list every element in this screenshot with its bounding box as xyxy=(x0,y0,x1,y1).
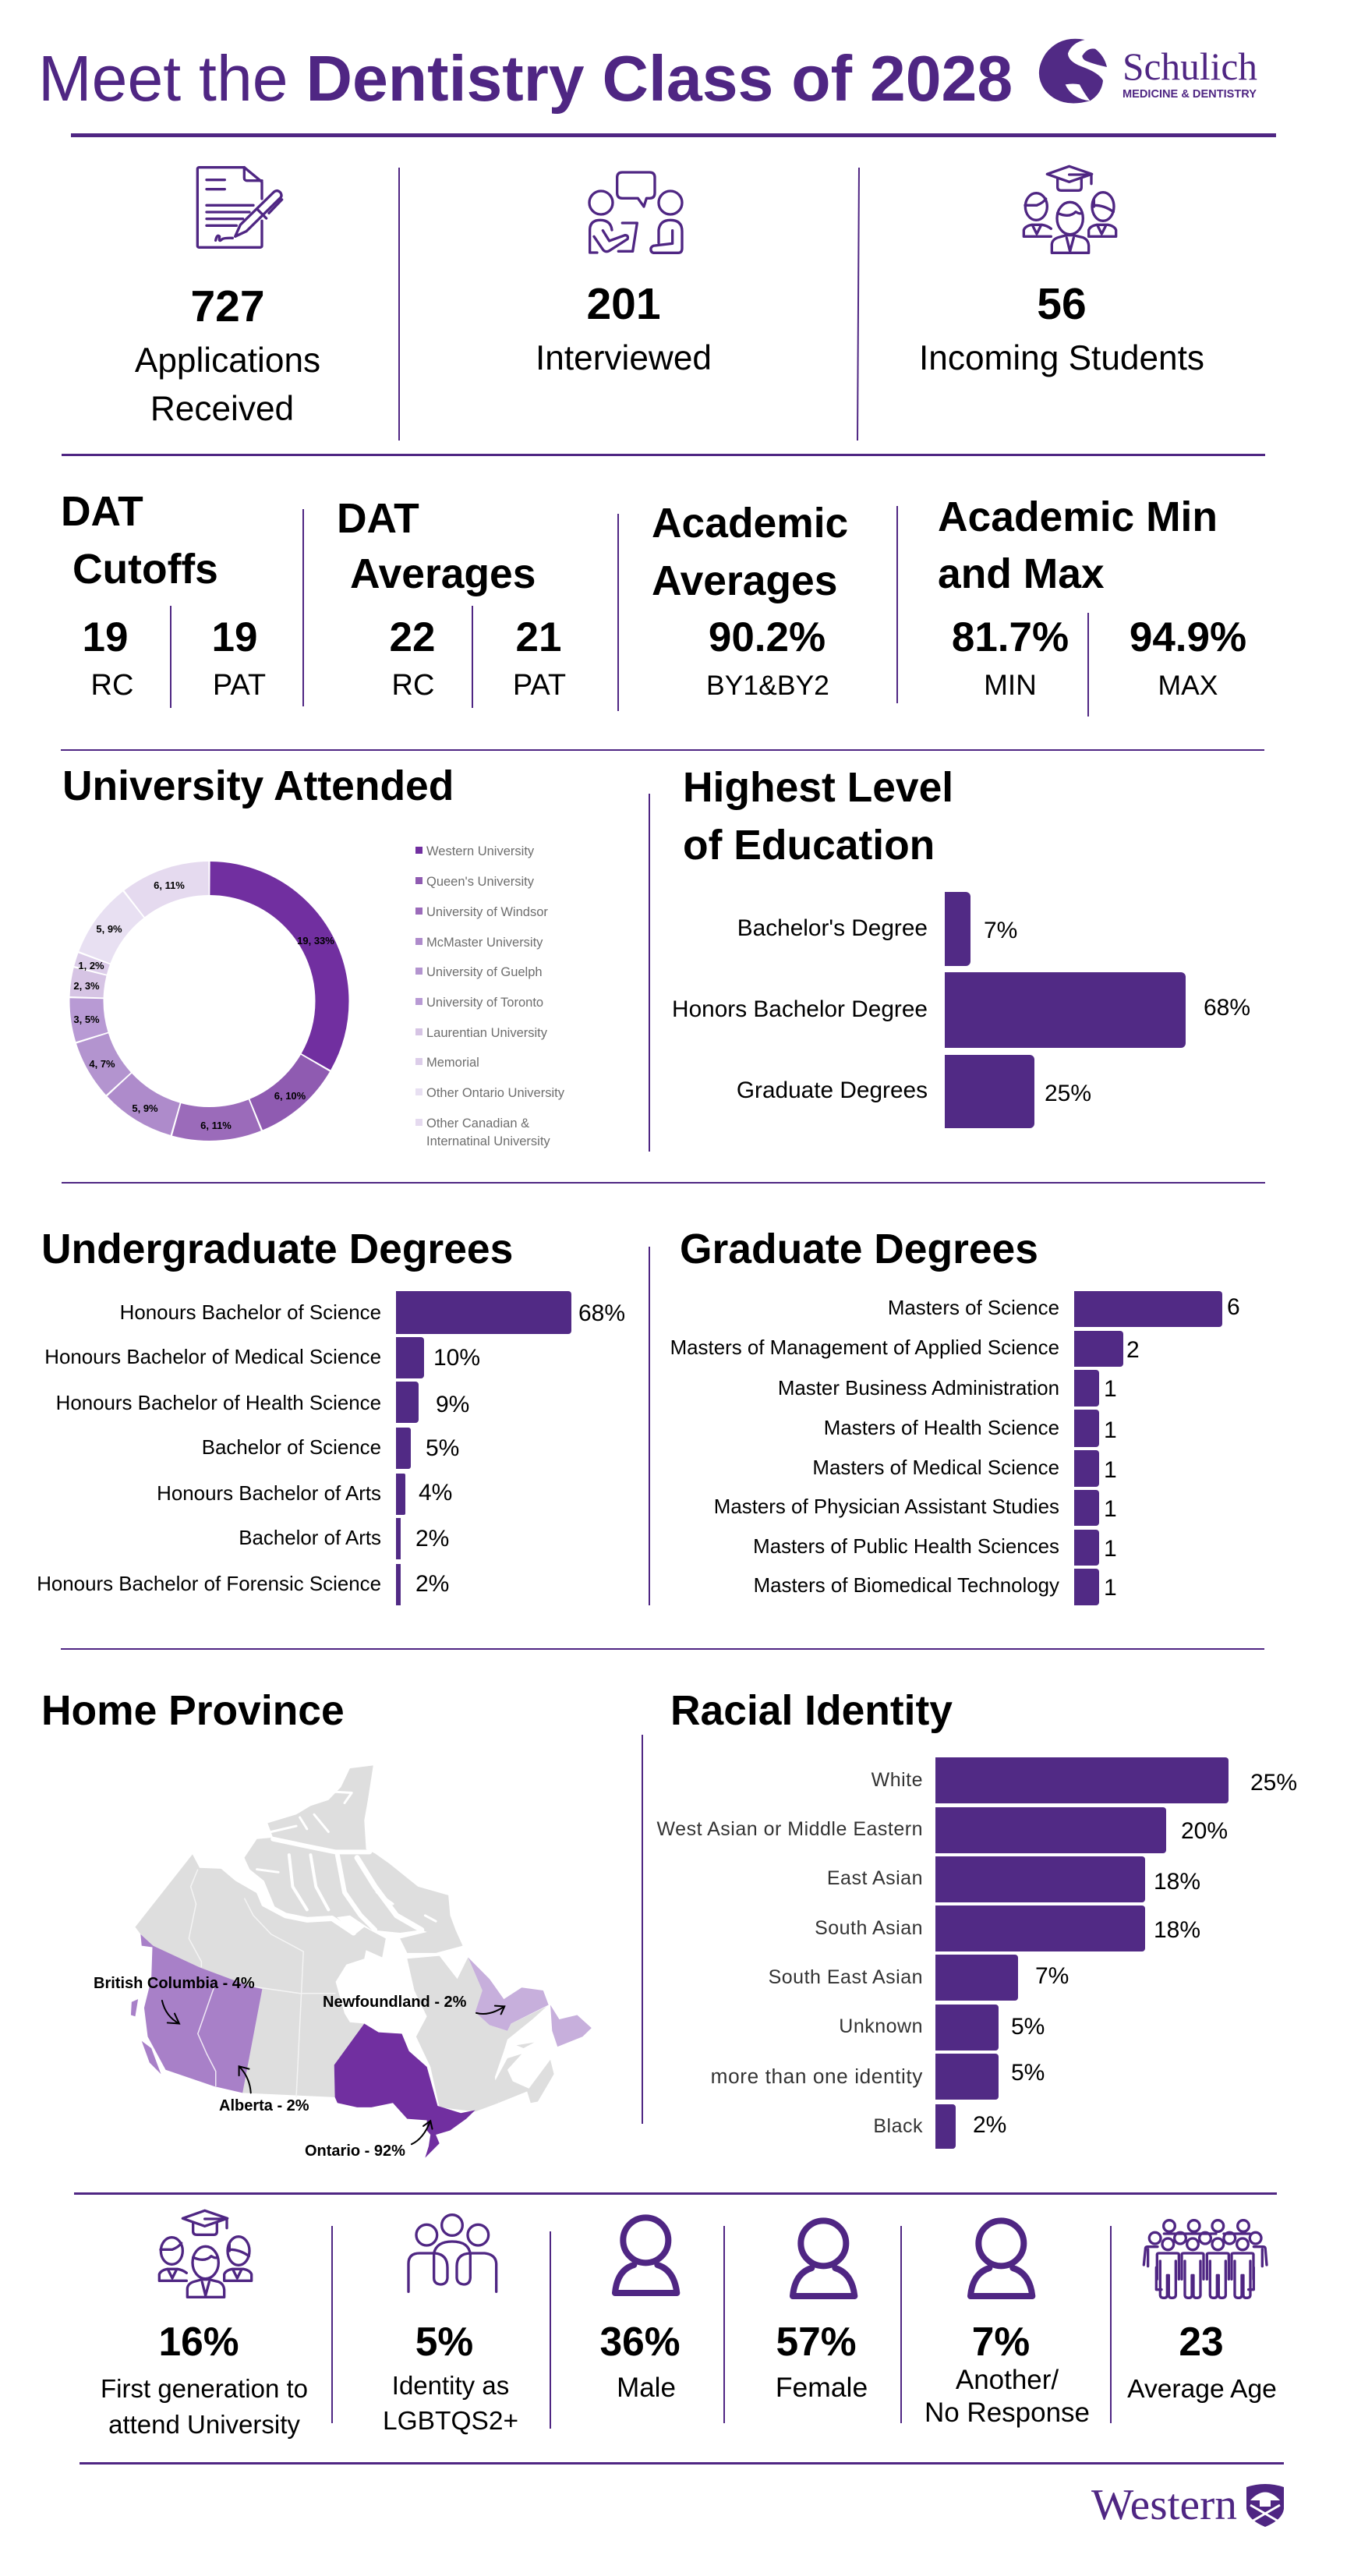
map: Canada home province: Alberta - 2% xyxy=(219,2097,309,2114)
DAT averages: PAT xyxy=(513,669,566,702)
stat: interviewed: Interviewed xyxy=(536,339,712,377)
heading: racial identity: Racial Identity xyxy=(670,1688,953,1734)
bar chart: graduate degrees: Masters of Biomedical Technology xyxy=(754,1575,1059,1597)
bar chart: graduate degrees: Master Business Administration xyxy=(778,1378,1059,1399)
panel: demographics xyxy=(101,2210,1277,2439)
donut chart: university attended: 19, 33% xyxy=(297,935,334,947)
bar chart: racial identity: South Asian xyxy=(815,1917,923,1939)
bar chart: undergraduate degrees: Bachelor of Science xyxy=(202,1437,381,1459)
donut chart: university attended: 6, 10% xyxy=(274,1090,306,1102)
icon: community xyxy=(408,2215,497,2291)
icon: person female xyxy=(793,2220,854,2296)
bar chart: undergraduate degrees: Honours Bachelor of Medical Science xyxy=(44,1346,381,1368)
legend: university attended: University of Toronto xyxy=(426,996,543,1010)
legend: university attended: Other Ontario University xyxy=(426,1086,565,1100)
stat: average age: 23 xyxy=(1179,2319,1224,2364)
legend: university attended: University of Guelph xyxy=(426,965,543,979)
bar chart: undergraduate degrees: 9% xyxy=(436,1392,469,1417)
bar chart: highest level of education: Bachelor's Degree xyxy=(737,915,928,941)
stat: male xyxy=(599,2319,681,2403)
bar chart: racial identity: West Asian or Middle Eastern xyxy=(657,1818,923,1840)
bar chart: racial identity: 5% xyxy=(1011,2060,1045,2086)
DAT averages: 21 xyxy=(516,614,561,660)
donut chart: university attended: 2, 3% xyxy=(73,980,100,992)
stat: applications xyxy=(135,281,320,428)
stat: another or no response: No Response xyxy=(925,2397,1090,2428)
academic min and max: 81.7% xyxy=(952,614,1069,660)
panel: application funnel xyxy=(135,166,1204,441)
stat: average age: Average Age xyxy=(1127,2375,1277,2404)
bar chart: racial identity: 25% xyxy=(1250,1770,1297,1796)
bar chart: highest level of education: 7% xyxy=(984,918,1017,943)
DAT cutoffs: RC xyxy=(91,669,133,702)
academic averages xyxy=(652,501,848,701)
donut chart: university attended: 5, 9% xyxy=(132,1102,158,1114)
stat: another or no response: 7% xyxy=(972,2319,1030,2364)
logo: Schulich Medicine & Dentistry: Schulich xyxy=(1122,44,1257,88)
bar chart: graduate degrees: 1 xyxy=(1104,1575,1117,1601)
donut chart: university attended: 3, 5% xyxy=(73,1014,100,1025)
stat: applications: Received xyxy=(150,390,294,428)
bar chart: graduate degrees: Masters of Science xyxy=(888,1297,1059,1319)
DAT cutoffs: 19 xyxy=(212,614,257,660)
donut chart: university attended: 4, 7% xyxy=(89,1058,115,1070)
bar chart: undergraduate degrees: 2% xyxy=(415,1526,449,1552)
academic averages: BY1&BY2 xyxy=(706,670,829,701)
academic averages: 90.2% xyxy=(709,614,826,660)
bar chart: undergraduate degrees: Honours Bachelor of Arts xyxy=(157,1483,381,1505)
stat: interviewed xyxy=(536,279,712,377)
bar chart: undergraduate degrees: 68% xyxy=(578,1300,625,1326)
DAT averages: Averages xyxy=(350,551,536,597)
heading: home province: Home Province xyxy=(41,1688,345,1734)
DAT averages xyxy=(337,496,566,702)
stat: interviewed: 201 xyxy=(586,279,661,329)
bar chart: racial identity xyxy=(657,1757,1297,2149)
bar chart: racial identity: Black xyxy=(873,2115,923,2137)
stat: first generation: First generation to xyxy=(101,2374,308,2403)
stat: incoming students: Incoming Students xyxy=(919,339,1204,377)
icon: signed document xyxy=(197,168,282,247)
bar chart: racial identity: 7% xyxy=(1035,1963,1069,1989)
bar chart: racial identity: South East Asian xyxy=(769,1966,923,1988)
bar chart: undergraduate degrees: Bachelor of Arts xyxy=(239,1527,381,1549)
legend: university attended: Western University xyxy=(426,844,535,858)
heading: university attended: University Attended xyxy=(62,763,454,809)
stat: male: 36% xyxy=(599,2319,681,2364)
bar chart: graduate degrees: 1 xyxy=(1104,1376,1117,1402)
bar chart: undergraduate degrees: 4% xyxy=(419,1480,452,1506)
legend: university attended: University of Windsor xyxy=(426,905,548,919)
stat: first generation xyxy=(101,2319,308,2439)
academic min and max: and Max xyxy=(938,551,1105,597)
bar chart: racial identity: 18% xyxy=(1154,1869,1200,1895)
bar chart: highest level of education: Honors Bachelor Degree xyxy=(672,996,928,1022)
icon: crowd xyxy=(1144,2220,1267,2298)
academic averages: Averages xyxy=(652,558,837,604)
bar chart: undergraduate degrees: 10% xyxy=(433,1345,480,1371)
logo: Western University: Western xyxy=(1091,2481,1237,2529)
academic averages: Academic xyxy=(652,501,848,547)
DAT cutoffs xyxy=(61,489,266,702)
bar chart: graduate degrees: 1 xyxy=(1104,1457,1117,1483)
legend: university attended: Laurentian University xyxy=(426,1026,548,1040)
bar chart: undergraduate degrees: 5% xyxy=(426,1435,459,1461)
panel: DAT and academic statistics xyxy=(61,489,1246,717)
bar chart: graduate degrees: Masters of Health Science xyxy=(824,1417,1059,1439)
stat: incoming students: 56 xyxy=(1037,279,1087,329)
stat: another or no response: Another/ xyxy=(956,2365,1059,2395)
bar chart: racial identity: Unknown xyxy=(839,2015,923,2037)
stat: first generation: 16% xyxy=(158,2319,239,2364)
bar chart: racial identity: more than one identity xyxy=(711,2065,923,2088)
map: Canada home province: British Columbia - 4% xyxy=(94,1975,255,1992)
map: Canada home province: Newfoundland - 2% xyxy=(323,1994,467,2011)
DAT cutoffs: 19 xyxy=(83,614,128,660)
academic min and max: 94.9% xyxy=(1130,614,1246,660)
legend: university attended: McMaster University xyxy=(426,936,543,950)
DAT averages: 22 xyxy=(390,614,435,660)
icon: first generation xyxy=(159,2210,252,2297)
bar chart: racial identity: White xyxy=(871,1769,923,1791)
bar chart: graduate degrees: 6 xyxy=(1227,1294,1240,1320)
stat: LGBTQS2+ xyxy=(383,2319,518,2436)
bar chart: highest level of education: Graduate Degrees xyxy=(737,1077,928,1103)
stat: another or no response xyxy=(925,2319,1090,2428)
DAT averages: RC xyxy=(392,669,434,702)
bar chart: racial identity: East Asian xyxy=(827,1867,923,1889)
donut chart: university attended: 1, 2% xyxy=(78,960,104,971)
title: Meet the Dentistry Class of 2028 xyxy=(38,43,1013,115)
stat: first generation: attend University xyxy=(108,2410,300,2439)
map: Canada home province xyxy=(94,1765,592,2160)
icon: interview xyxy=(589,172,682,253)
stat: average age xyxy=(1127,2319,1277,2404)
bar chart: racial identity: 20% xyxy=(1181,1818,1228,1844)
DAT averages: DAT xyxy=(337,496,419,542)
logo: Schulich Medicine & Dentistry: MEDICINE & DENTISTRY xyxy=(1122,87,1257,101)
bar chart: undergraduate degrees: 2% xyxy=(415,1571,449,1597)
DAT cutoffs: PAT xyxy=(213,669,266,702)
donut chart: university attended: 6, 11% xyxy=(200,1120,232,1131)
bar chart: racial identity: 18% xyxy=(1154,1917,1200,1943)
stat: female: 57% xyxy=(776,2319,857,2364)
stat: female: Female xyxy=(776,2372,868,2403)
bar chart: graduate degrees: Masters of Management of Applied Science xyxy=(670,1337,1059,1359)
bar chart: highest level of education: 68% xyxy=(1204,995,1250,1021)
donut chart: university attended: 6, 11% xyxy=(154,879,185,891)
bar chart: highest level of education xyxy=(672,892,1250,1128)
stat: applications: Applications xyxy=(135,341,320,380)
heading: undergraduate degrees: Undergraduate Degrees xyxy=(41,1226,513,1272)
legend: university attended xyxy=(415,844,565,1148)
bar chart: highest level of education: 25% xyxy=(1045,1081,1091,1106)
bar chart: racial identity: 2% xyxy=(973,2112,1006,2138)
bar chart: undergraduate degrees: Honours Bachelor of Health Science xyxy=(56,1392,381,1414)
bar chart: graduate degrees: 1 xyxy=(1104,1417,1117,1443)
bar chart: graduate degrees: Masters of Medical Science xyxy=(812,1457,1059,1479)
bar chart: undergraduate degrees xyxy=(37,1291,625,1605)
icon: person male xyxy=(615,2217,677,2293)
legend: university attended: Other Canadian & xyxy=(426,1116,529,1131)
academic min and max: MIN xyxy=(984,669,1037,701)
bar chart: graduate degrees: 2 xyxy=(1126,1337,1140,1363)
stat: applications: 727 xyxy=(190,281,265,331)
bar chart: graduate degrees: 1 xyxy=(1104,1536,1117,1562)
heading: highest level of education xyxy=(683,765,953,869)
academic min and max: MAX xyxy=(1158,670,1218,701)
bar chart: graduate degrees: Masters of Physician Assistant Studies xyxy=(714,1496,1059,1518)
DAT cutoffs: Cutoffs xyxy=(72,547,218,593)
academic min and max: Academic Min xyxy=(938,494,1218,540)
legend: university attended: Queen's University xyxy=(426,875,535,889)
stat: LGBTQS2+: 5% xyxy=(415,2319,473,2364)
icon: person another xyxy=(970,2220,1032,2296)
stat: female xyxy=(776,2319,868,2403)
donut chart: university attended: 5, 9% xyxy=(96,923,122,935)
stat: male: Male xyxy=(617,2373,676,2403)
DAT cutoffs: DAT xyxy=(61,489,143,535)
bar chart: graduate degrees xyxy=(670,1291,1240,1605)
donut chart: university attended xyxy=(73,878,334,1131)
stat: LGBTQS2+: Identity as xyxy=(392,2371,509,2400)
arrows: map callouts xyxy=(162,2001,504,2144)
bar chart: undergraduate degrees: Honours Bachelor of Science xyxy=(120,1302,381,1324)
heading: highest level of education: Highest Level xyxy=(683,765,953,811)
bar chart: graduate degrees: Masters of Public Health Sciences xyxy=(753,1536,1059,1558)
map: Canada home province: Ontario - 92% xyxy=(305,2143,405,2160)
bar chart: graduate degrees: 1 xyxy=(1104,1496,1117,1522)
stat: LGBTQS2+: LGBTQS2+ xyxy=(383,2407,518,2436)
heading: highest level of education: of Education xyxy=(683,823,935,869)
legend: university attended: Memorial xyxy=(426,1056,479,1070)
bar chart: undergraduate degrees: Honours Bachelor of Forensic Science xyxy=(37,1573,381,1595)
stat: incoming students xyxy=(919,279,1204,377)
icon: graduates xyxy=(1024,166,1116,253)
heading: graduate degrees: Graduate Degrees xyxy=(680,1226,1038,1272)
academic min and max xyxy=(938,494,1246,701)
logo: Schulich Medicine & Dentistry xyxy=(1039,39,1257,104)
bar chart: racial identity: 5% xyxy=(1011,2014,1045,2040)
legend: university attended: Internatinal University xyxy=(426,1134,550,1148)
